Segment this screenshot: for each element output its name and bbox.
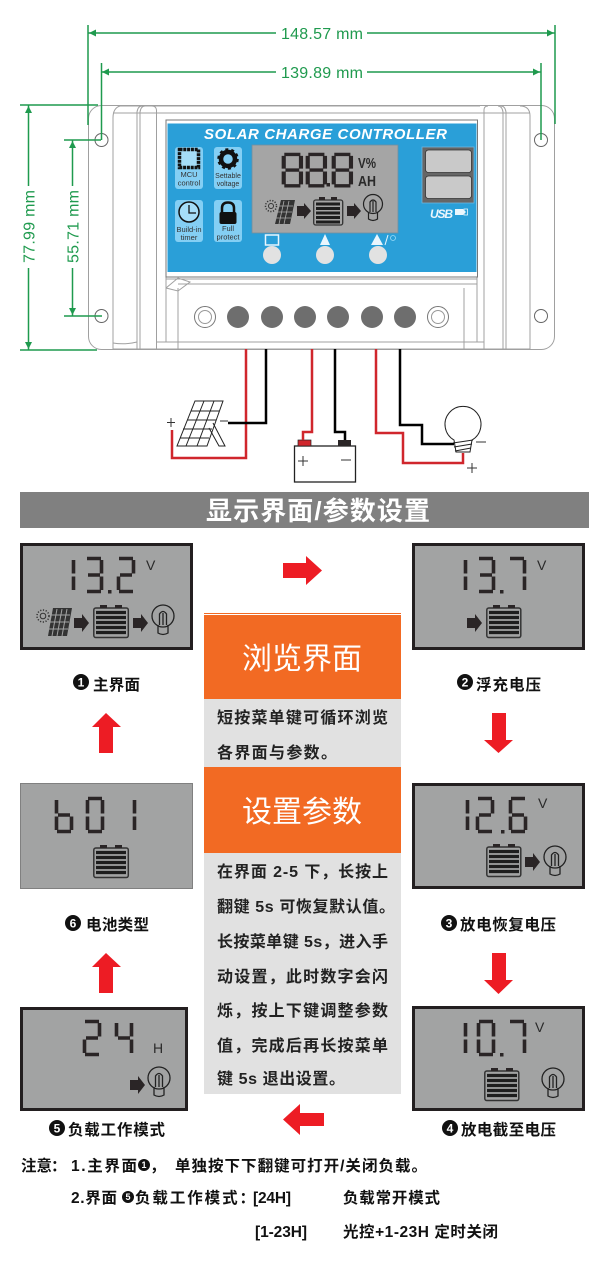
heading: settings: 设置参数 <box>242 796 362 829</box>
red wire: battery <box>303 349 312 440</box>
arrow: down <box>484 953 513 994</box>
arrow: left <box>283 1104 324 1135</box>
controller title: SOLAR CHARGE CONTROLLER <box>204 126 447 143</box>
notes: 1.主界面 <box>71 1157 137 1175</box>
tile: MCU control: control <box>178 178 201 188</box>
controller drawing <box>88 106 554 350</box>
arrow <box>133 614 148 632</box>
tile: MCU control: MCU <box>180 170 198 179</box>
load polarity <box>467 442 486 473</box>
face plate <box>166 120 478 277</box>
lcd value 13.2 <box>74 558 134 594</box>
lcd value 13.7 <box>466 558 524 594</box>
centre panel <box>204 614 401 1094</box>
lcd value 24 <box>84 1022 132 1054</box>
panel buttons <box>263 246 387 264</box>
lcd screen 4: discharge cutoff voltage <box>414 1008 584 1110</box>
battery <box>294 440 356 482</box>
dimension: width 139.89: 139.89 mm <box>281 65 363 82</box>
tile: full protect: protect <box>217 232 240 242</box>
arrow: up <box>92 713 121 753</box>
notes: 负载常开模式 <box>343 1188 440 1207</box>
lcd digits 88.8 <box>284 154 351 186</box>
label: discharge cutoff voltage: 4 <box>447 1122 454 1136</box>
battery <box>94 605 128 638</box>
lcd screen 5: load work mode <box>22 1008 186 1110</box>
label: discharge recovery voltage: 3 <box>446 916 453 930</box>
lcd screen 6: battery type <box>20 784 192 888</box>
heading: browse interface <box>204 615 401 699</box>
lcd screen 1: main interface <box>22 544 192 648</box>
dimension: height 55.71: 55.71 mm <box>66 190 82 263</box>
main lcd: AH <box>358 173 376 190</box>
text: settings instructions: 在界面 2-5 下，长按上 <box>217 862 388 881</box>
lcd arrow <box>297 203 311 219</box>
label: battery type: 电池类型 <box>86 916 149 934</box>
label: main interface <box>73 674 140 694</box>
battery <box>94 845 128 878</box>
usb ports: USB <box>430 207 453 221</box>
arrow: up <box>92 953 121 993</box>
tile: full protect: Full <box>222 224 234 233</box>
lcd arrow <box>347 203 361 219</box>
heading: settings <box>204 767 401 853</box>
red wire: panel <box>172 349 246 458</box>
lcd value b01 <box>56 798 134 832</box>
text: settings instructions: 动设置，此时数字会闪 <box>217 967 388 986</box>
lcd screen 2: float voltage <box>414 544 584 648</box>
bulb <box>148 1067 170 1096</box>
battery <box>485 1068 519 1100</box>
text: settings instructions: 值，完成后再长按菜单 <box>217 1036 388 1055</box>
arrow <box>130 1076 145 1094</box>
black wire: panel <box>228 349 266 423</box>
arrow: down <box>484 713 513 753</box>
screw holes <box>95 134 548 322</box>
unit V: V <box>146 557 156 573</box>
tile: build-in timer: timer <box>181 233 198 242</box>
label: battery type: 6 <box>70 916 77 930</box>
solar panel <box>177 401 225 446</box>
lcd value 10.7 <box>466 1022 524 1056</box>
dimension: height 77.99: 77.99 mm <box>22 190 38 263</box>
unit V: V <box>537 557 547 573</box>
text: settings instructions: 长按菜单键 5s，进入手 <box>217 932 388 951</box>
text: settings instructions <box>204 853 401 1094</box>
tile: build-in timer: Build-in <box>176 225 202 234</box>
text: settings instructions: 键 5s 退出设置。 <box>217 1070 345 1088</box>
notes: 5 <box>125 1192 131 1202</box>
sun and panel <box>37 608 72 636</box>
notes: 1 <box>141 1160 147 1170</box>
unit V: V <box>538 795 548 811</box>
label: discharge cutoff voltage: 放电截至电压 <box>461 1121 556 1139</box>
tile: settable voltage: voltage <box>217 181 239 188</box>
label: main interface: 主界面 <box>93 676 140 694</box>
controller housing outline <box>88 106 554 350</box>
usb ports <box>422 147 474 221</box>
notes: ， <box>150 1158 166 1175</box>
lcd battery <box>314 197 343 225</box>
battery <box>487 844 521 876</box>
notes: 2.界面 <box>71 1189 117 1207</box>
section header band <box>20 492 589 528</box>
notes: [24H] <box>253 1190 291 1207</box>
section header band: 显示界面/参数设置 <box>206 496 430 526</box>
light bulb <box>445 406 481 452</box>
notes: [1-23H] <box>255 1224 307 1241</box>
wiring diagram <box>167 349 486 482</box>
terminal row <box>194 306 448 328</box>
text: browse instructions: 各界面与参数。 <box>217 743 337 762</box>
tile: settable voltage <box>214 147 242 189</box>
red wire: load <box>376 349 463 463</box>
notes <box>21 1156 498 1241</box>
button icons <box>266 234 396 245</box>
notes: 单独按下下翻键可打开/关闭负载。 <box>175 1156 427 1175</box>
label: float voltage: 浮充电压 <box>476 675 541 694</box>
text: browse instructions <box>204 699 401 767</box>
bulb <box>544 846 566 876</box>
lcd value 12.6 <box>468 798 526 834</box>
tile: MCU control <box>175 147 203 189</box>
label: discharge recovery voltage: 放电恢复电压 <box>460 916 556 934</box>
battery <box>487 605 521 638</box>
text: settings instructions: 烁，按上下键调整参数 <box>217 1001 388 1020</box>
label: float voltage: 2 <box>462 676 469 690</box>
heading: browse interface: 浏览界面 <box>242 643 362 676</box>
lcd screen 3: discharge recovery voltage <box>414 784 584 888</box>
bulb <box>152 605 174 634</box>
unit H: H <box>153 1040 163 1056</box>
main lcd <box>252 145 398 233</box>
label: float voltage <box>457 674 541 694</box>
notes: ： <box>51 1158 67 1175</box>
label: battery type <box>65 915 149 934</box>
label: load work mode: 5 <box>54 1122 61 1136</box>
bulb <box>542 1068 564 1098</box>
tile: full protect <box>214 200 242 242</box>
arrow <box>74 614 89 632</box>
text: browse instructions: 短按菜单键可循环浏览 <box>217 708 388 727</box>
lcd bulb <box>364 194 382 220</box>
label: load work mode: 负载工作模式 <box>68 1120 165 1139</box>
text: settings instructions: 翻键 5s 可恢复默认值。 <box>217 897 395 916</box>
lcd units: V% <box>358 155 376 172</box>
dimension lines <box>20 25 555 350</box>
tile: build-in timer <box>175 200 203 242</box>
unit V: V <box>535 1019 545 1035</box>
dimension: width 148.57: 148.57 mm <box>281 26 363 43</box>
notes: 光控+1-23H 定时关闭 <box>343 1222 498 1241</box>
notes: 负载工作模式： <box>135 1188 255 1207</box>
black wire: load <box>400 349 454 444</box>
panel polarity <box>167 418 228 427</box>
arrow <box>467 614 482 632</box>
arrow: right <box>283 556 322 585</box>
label: main interface: 1 <box>78 676 85 690</box>
arrow <box>525 853 540 871</box>
notes: 注意 <box>21 1156 52 1175</box>
lcd sun and panel <box>266 200 295 224</box>
black wire: battery <box>335 349 345 440</box>
tile: settable voltage: Settable <box>215 173 241 180</box>
